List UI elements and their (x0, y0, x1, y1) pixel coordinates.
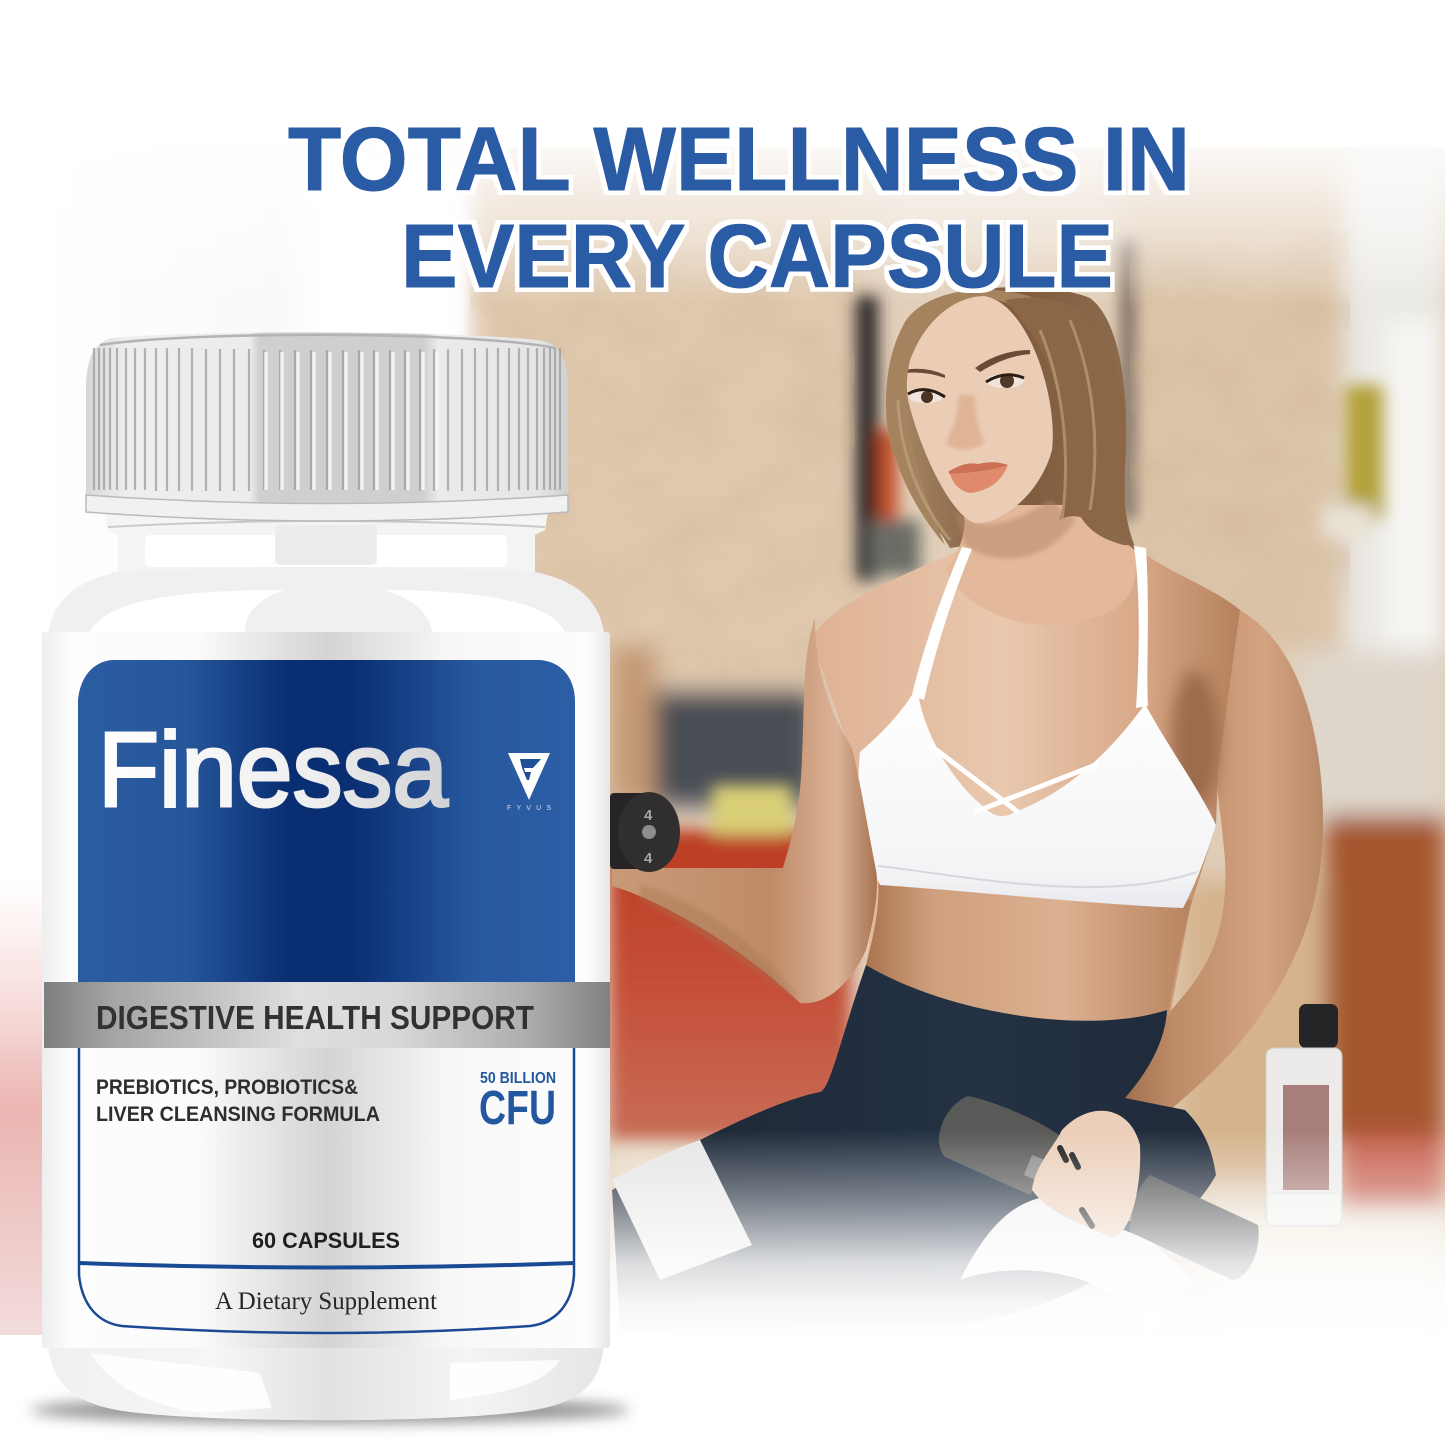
woman: leg white panel (612, 1140, 752, 1280)
cap bottom lip (86, 495, 568, 521)
woman: right arm (1090, 602, 1323, 1135)
woman: forearm shading (640, 885, 800, 1000)
brand logo: FYVUS (507, 805, 551, 812)
supplement bottle (30, 332, 630, 1423)
dumbbell: raised: 4 (644, 807, 653, 824)
woman: midriff (866, 878, 1192, 1025)
title (288, 110, 1190, 307)
potency small text: 50 BILLION (480, 1070, 556, 1087)
woman: left arm (612, 618, 877, 1003)
bra: cups and band (858, 686, 1216, 908)
woman: hand with dark nails (1032, 1111, 1140, 1238)
woman: torso and shoulders (812, 545, 1240, 1015)
label: outline and divider (79, 1048, 574, 1333)
woman: hair strands (898, 320, 1095, 540)
cap rib highlights (266, 352, 437, 490)
title line 2: EVERY CAPSULE (401, 207, 1113, 307)
water bottle (1266, 1004, 1342, 1226)
woman: hair back (886, 287, 1137, 552)
dumbbell: raised: 4 (644, 850, 653, 867)
bottle base highlights (90, 1353, 560, 1413)
cap ribs (94, 348, 560, 491)
bottle neck (104, 512, 548, 578)
title line 1: TOTAL WELLNESS IN (288, 110, 1190, 210)
woman: nose shadow (946, 395, 985, 450)
bottle shoulder (48, 567, 604, 634)
capsule count: 60 CAPSULES (252, 1228, 400, 1253)
bra: hem seam (878, 866, 1197, 887)
dumbbell: lower (939, 1096, 1259, 1280)
formula text line 2: LIVER CLEANSING FORMULA (96, 1103, 380, 1126)
dumbbell: bar (1024, 1155, 1160, 1228)
bra: right strap (1134, 546, 1148, 708)
woman: knee white panel (960, 1198, 1195, 1335)
dumbbell: raised (610, 792, 680, 872)
bottle cap (86, 332, 568, 521)
dumbbell: right weight (1130, 1175, 1259, 1280)
woman: eyes and brows (905, 350, 1030, 403)
bottle shadow (30, 1397, 630, 1423)
potency CFU: CFU (479, 1082, 556, 1135)
woman: shoulder shading (1171, 670, 1219, 810)
woman: neck shadow (955, 500, 1075, 559)
woman: lips (948, 462, 1008, 493)
woman: face (907, 296, 1053, 523)
woman: leggings (612, 965, 1216, 1330)
dietary supplement text: A Dietary Supplement (215, 1288, 437, 1315)
band text: DIGESTIVE HEALTH SUPPORT (96, 999, 534, 1036)
brand logo (507, 753, 551, 812)
label: blue panel (78, 660, 575, 985)
woman: hair front (886, 290, 1040, 545)
woman athlete illustration (610, 287, 1342, 1335)
woman: white sports bra (858, 546, 1216, 908)
woman: hair side (1005, 298, 1137, 552)
label: silver band (44, 982, 610, 1048)
dumbbell: left weight (939, 1096, 1060, 1195)
bra: left strap (912, 547, 972, 700)
woman: neck (945, 505, 1136, 625)
cap top rim (100, 335, 555, 348)
bottom fade over photo (610, 1130, 1445, 1335)
brand name: Finessa (98, 711, 448, 829)
bottle body (42, 632, 610, 1348)
bottle base (48, 1345, 604, 1420)
formula text line 1: PREBIOTICS, PROBIOTICS& (96, 1076, 358, 1099)
bra: cross straps (930, 745, 1098, 812)
